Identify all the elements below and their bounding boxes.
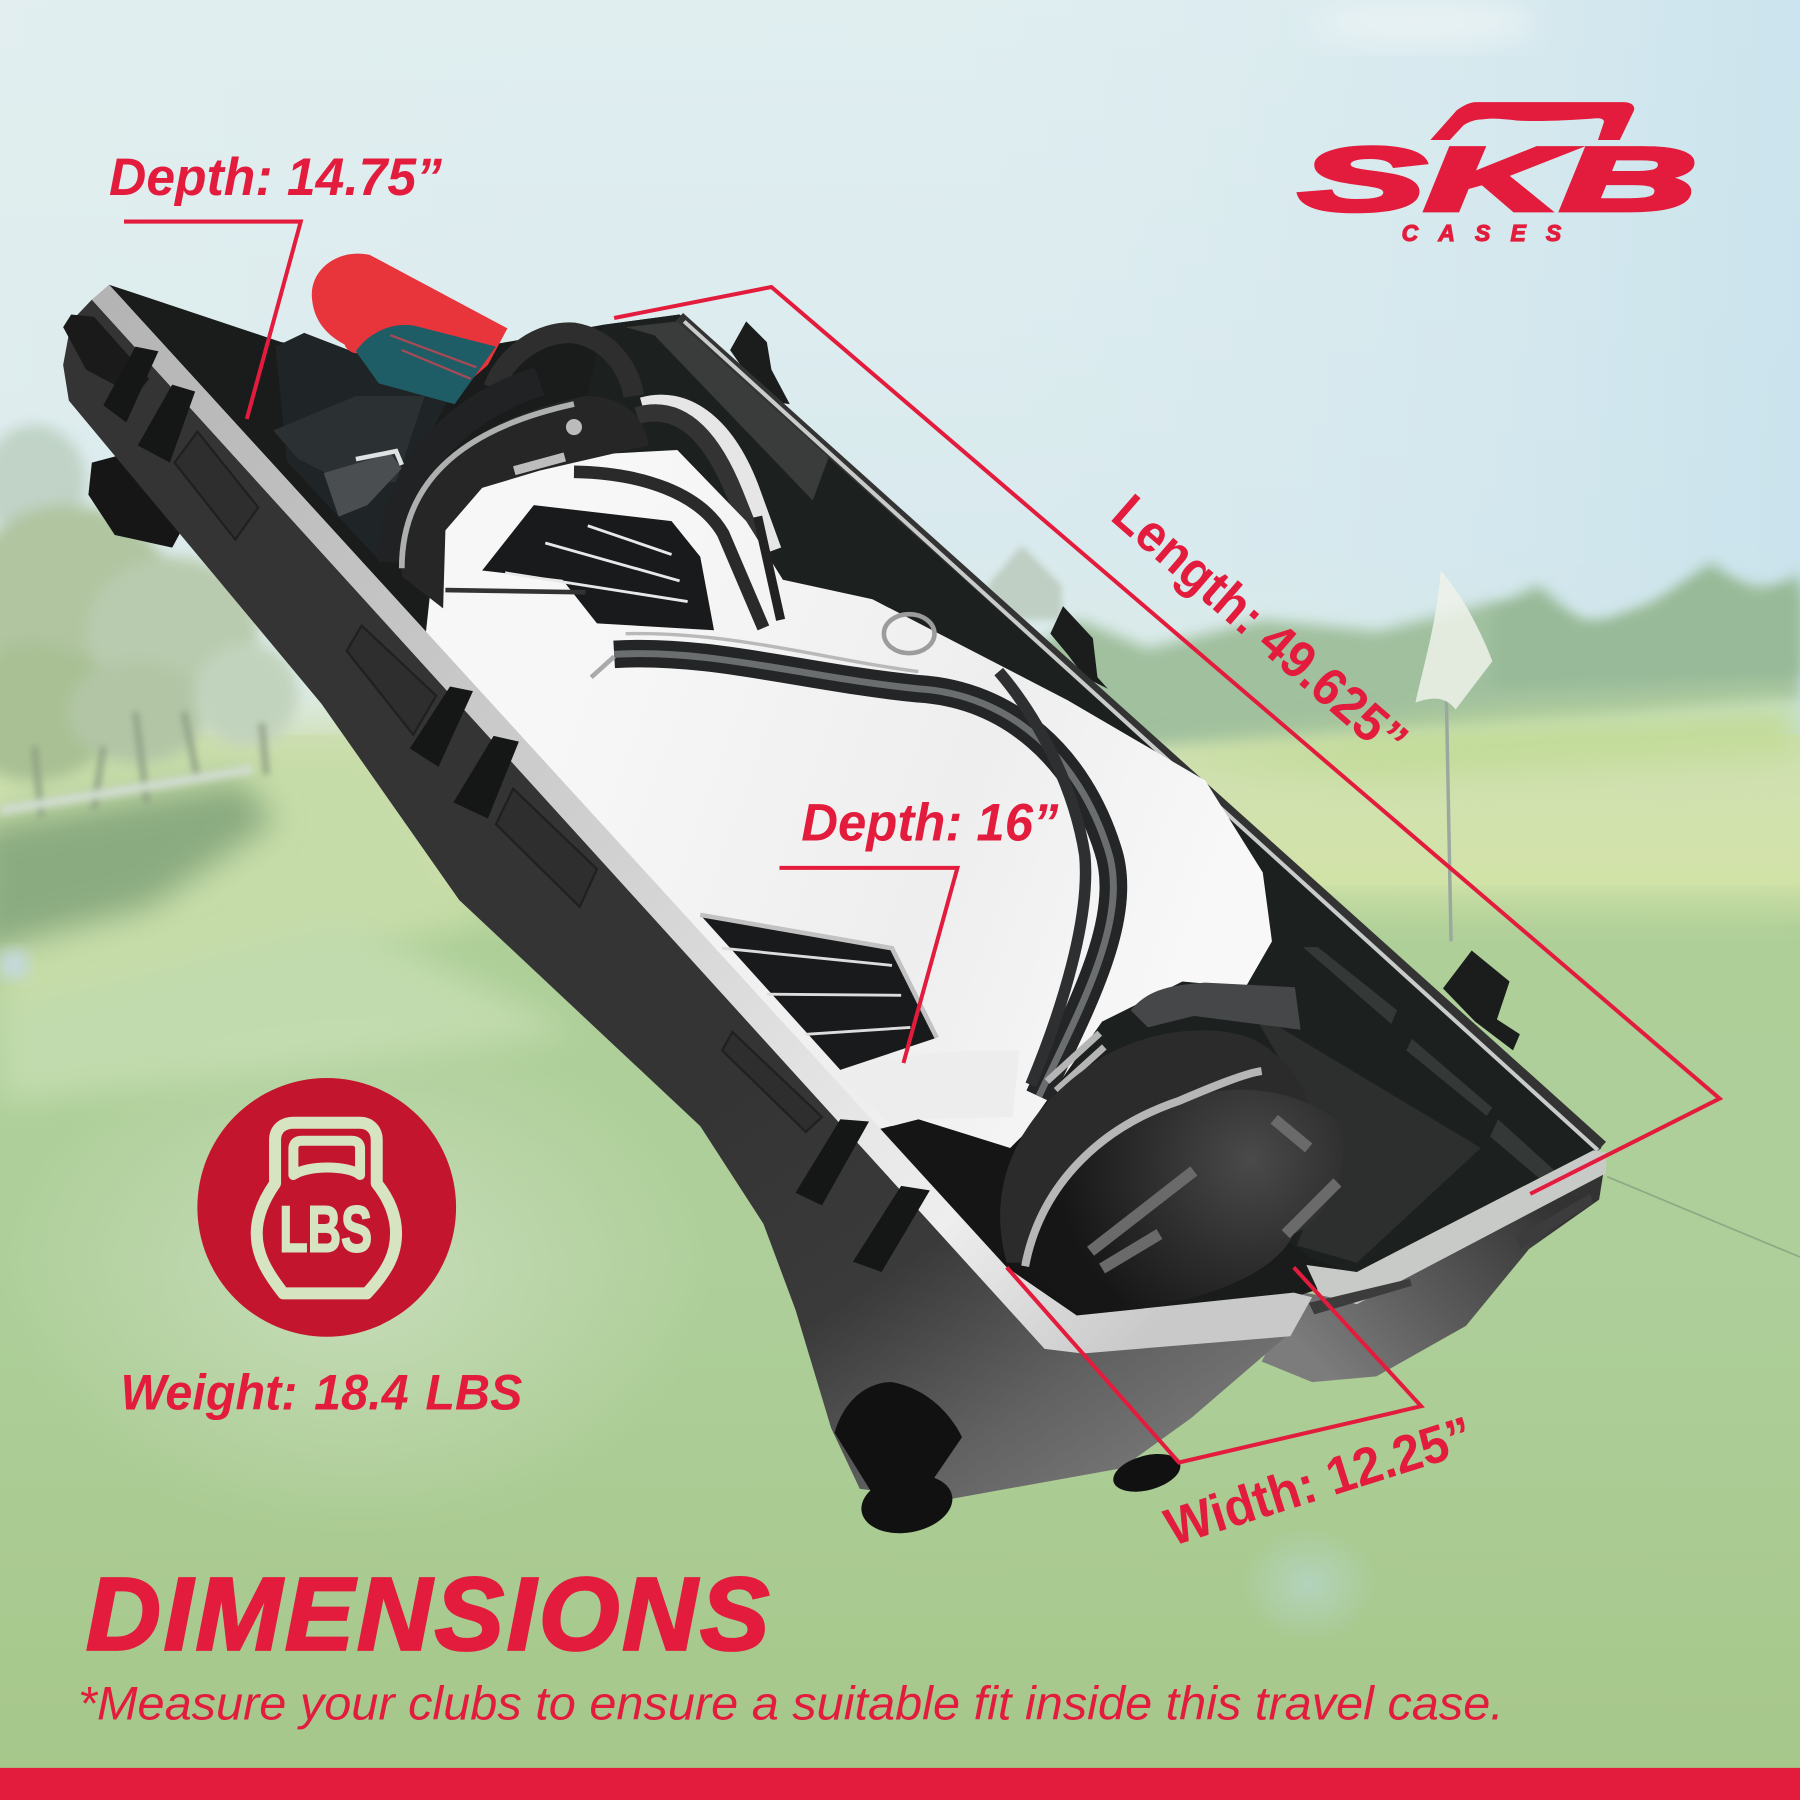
upper bag pocket [445,472,781,630]
front shell exterior [63,300,1312,1499]
front shell rim [92,285,1312,1353]
bag clip ring [884,614,934,653]
icon: kettlebell weight [197,1078,456,1337]
front shell end interior [872,1096,1102,1316]
callout: depth 16 [779,793,1059,1063]
footnote: *Measure your clubs to ensure a suitable fit inside this travel case. [78,1677,1504,1730]
logo: SKB Cases [1299,102,1697,246]
logo: SKB Cases: SKB [1299,129,1697,229]
callout: length: Length: 49.625” [1101,483,1419,770]
back shell exterior [1262,1171,1604,1382]
back shell interior [574,315,1601,1274]
icon: kettlebell weight: LBS [279,1193,372,1266]
callout: width: Width: 12.25” [1158,1406,1480,1558]
bag handle [494,333,634,396]
base disc [1025,1071,1344,1316]
bag mesh collar [393,381,540,562]
bag zipper band [591,634,1113,1096]
case latches [103,347,930,1272]
bag strap [1131,983,1301,1030]
flag on pole [1415,571,1492,941]
case interior underlay [109,285,1601,1320]
back shell latches [730,321,1520,1050]
bottom red bar [0,1768,1800,1800]
lower storage lobe [88,453,195,548]
callout: depth 14.75 [109,148,443,419]
title: DIMENSIONS [86,1556,769,1672]
case rails [174,432,822,1132]
logo: SKB Cases: CASES [1402,220,1562,246]
top end handle [63,315,149,396]
lower bag pocket [700,915,937,1070]
bag top collar [401,396,649,608]
callout: depth 14.75: Depth: 14.75” [109,148,443,207]
case wheels [835,1382,1185,1540]
callout: depth 16: Depth: 16” [801,793,1059,852]
product: golf travel case with bag [63,254,1606,1540]
head covers [273,254,507,563]
back shell rail [1309,1194,1593,1314]
bag side handle [637,405,771,551]
bag lower white band [840,1050,1019,1126]
callout: width [1007,1267,1480,1558]
white golf bag body [425,450,1272,1148]
base leather [1000,1030,1307,1263]
back shell rim [680,317,1603,1150]
weight label: Weight: 18.4 LBS [121,1364,523,1421]
